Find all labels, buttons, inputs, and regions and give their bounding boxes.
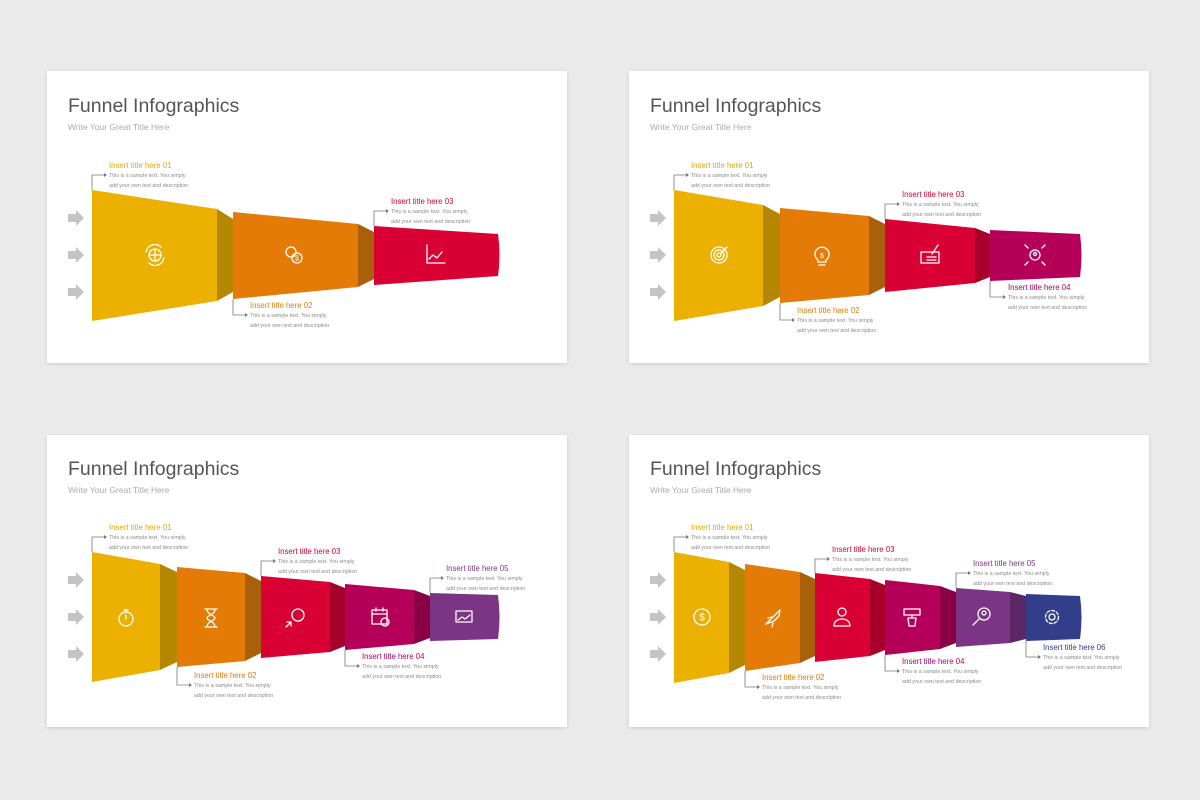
label 06 xyxy=(1026,641,1122,671)
icon: dollar coin: $ xyxy=(699,612,705,624)
label 01: Insert title here 01 xyxy=(109,161,171,170)
label 03 xyxy=(885,190,981,219)
label 03: add your own text and description xyxy=(278,569,357,575)
icon: money pin: $ xyxy=(295,256,299,262)
slide 4: six-step funnel xyxy=(629,435,1149,727)
label 05: Insert title here 05 xyxy=(973,559,1036,568)
icon: stopwatch xyxy=(119,610,133,626)
label 02: add your own text and description xyxy=(797,328,876,334)
label 03: This is a sample text. You simply xyxy=(902,202,979,208)
icon: money pin xyxy=(286,247,302,263)
icon: line chart xyxy=(427,245,445,263)
label 05: This is a sample text. You simply xyxy=(446,576,523,582)
label 03: This is a sample text. You simply xyxy=(832,557,909,563)
input arrows xyxy=(68,210,84,300)
label 06: add your own text and description xyxy=(1043,665,1122,671)
label 02: This is a sample text. You simply xyxy=(797,318,874,324)
subtitle: Write Your Great Title Here xyxy=(68,485,170,495)
label 04: add your own text and description xyxy=(362,674,441,680)
icon: network user xyxy=(1025,245,1045,265)
label 03 xyxy=(815,545,911,573)
label 04 xyxy=(990,281,1087,311)
icon: rocket xyxy=(766,610,780,627)
icon: click dollar xyxy=(286,609,304,627)
label 05: add your own text and description xyxy=(446,586,525,592)
slide 2: four-step funnel xyxy=(629,71,1149,363)
label 02: Insert title here 02 xyxy=(762,673,824,682)
funnel xyxy=(674,190,1082,321)
label 03: add your own text and description xyxy=(391,219,470,225)
subtitle: Write Your Great Title Here xyxy=(650,485,752,495)
label 04: add your own text and description xyxy=(1008,305,1087,311)
label 01: This is a sample text. You simply xyxy=(109,173,186,179)
label 02: This is a sample text. You simply xyxy=(762,685,839,691)
label 04: add your own text and description xyxy=(902,679,981,685)
title: Funnel Infographics xyxy=(68,458,240,480)
label 01: This is a sample text. You simply xyxy=(691,535,768,541)
label 02: This is a sample text. You simply xyxy=(194,683,271,689)
icon: podium xyxy=(904,609,920,626)
label 04: This is a sample text. You simply xyxy=(362,664,439,670)
label 02 xyxy=(745,671,841,701)
label 02 xyxy=(780,303,876,334)
label 03 xyxy=(374,197,470,226)
label 01 xyxy=(674,523,770,552)
funnel xyxy=(92,552,500,682)
label 01: add your own text and description xyxy=(691,183,770,189)
label 04 xyxy=(885,655,981,685)
label 06: This is a sample text. You simply xyxy=(1043,655,1120,661)
label 05 xyxy=(430,564,525,593)
icon: globe cycle xyxy=(146,245,164,265)
label 01 xyxy=(674,161,770,190)
label 01: This is a sample text. You simply xyxy=(109,535,186,541)
funnel xyxy=(674,552,1082,683)
label 05 xyxy=(956,559,1052,588)
label 02 xyxy=(233,299,329,329)
label 03: add your own text and description xyxy=(902,212,981,218)
input arrows xyxy=(650,572,666,662)
icon: target xyxy=(711,247,727,263)
label 02: Insert title here 02 xyxy=(797,306,859,315)
title: Funnel Infographics xyxy=(68,95,240,117)
label 03: Insert title here 03 xyxy=(902,190,964,199)
input arrows xyxy=(650,210,666,300)
label 03 xyxy=(261,547,357,576)
title: Funnel Infographics xyxy=(650,95,822,117)
label 01: add your own text and description xyxy=(109,183,188,189)
label 02 xyxy=(177,667,273,699)
label 02: add your own text and description xyxy=(250,323,329,329)
label 03: This is a sample text. You simply xyxy=(278,559,355,565)
label 04: This is a sample text. You simply xyxy=(902,669,979,675)
label 03: This is a sample text. You simply xyxy=(391,209,468,215)
label 05: Insert title here 05 xyxy=(446,564,509,573)
icon: gear xyxy=(1046,610,1058,624)
label 03: Insert title here 03 xyxy=(278,547,340,556)
label 04: Insert title here 04 xyxy=(1008,283,1071,292)
icon: search user xyxy=(973,608,990,625)
label 04: Insert title here 04 xyxy=(362,652,425,661)
label 03: Insert title here 03 xyxy=(832,545,894,554)
icon: businessman xyxy=(834,608,850,626)
label 01: add your own text and description xyxy=(691,545,770,551)
label 04: Insert title here 04 xyxy=(902,657,965,666)
icon: calendar xyxy=(372,608,389,626)
label 01: add your own text and description xyxy=(109,545,188,551)
label 02: This is a sample text. You simply xyxy=(250,313,327,319)
label 02: add your own text and description xyxy=(762,695,841,701)
funnel xyxy=(92,190,500,321)
icon: dollar coin xyxy=(694,609,710,625)
label 01 xyxy=(92,523,188,552)
slide 3: five-step funnel xyxy=(47,435,567,727)
title: Funnel Infographics xyxy=(650,458,822,480)
icon: cheque xyxy=(921,245,939,263)
label 06: Insert title here 06 xyxy=(1043,643,1105,652)
label 01 xyxy=(92,161,188,190)
label 02: add your own text and description xyxy=(194,693,273,699)
label 04: This is a sample text. You simply xyxy=(1008,295,1085,301)
label 05: This is a sample text. You simply xyxy=(973,571,1050,577)
label 03: Insert title here 03 xyxy=(391,197,453,206)
icon: hourglass xyxy=(205,609,217,627)
subtitle: Write Your Great Title Here xyxy=(650,122,752,132)
label 01: This is a sample text. You simply xyxy=(691,173,768,179)
icon: presentation chart xyxy=(456,611,472,622)
label 02: Insert title here 02 xyxy=(194,671,256,680)
label 04 xyxy=(345,650,441,680)
label 02: Insert title here 02 xyxy=(250,301,312,310)
icon: bulb dollar xyxy=(815,247,829,265)
label 01: Insert title here 01 xyxy=(109,523,171,532)
subtitle: Write Your Great Title Here xyxy=(68,122,170,132)
label 05: add your own text and description xyxy=(973,581,1052,587)
label 03: add your own text and description xyxy=(832,567,911,573)
icon: bulb dollar: $ xyxy=(820,253,824,260)
label 01: Insert title here 01 xyxy=(691,523,753,532)
label 01: Insert title here 01 xyxy=(691,161,753,170)
slide 1: three-step funnel xyxy=(47,71,567,363)
input arrows xyxy=(68,572,84,662)
